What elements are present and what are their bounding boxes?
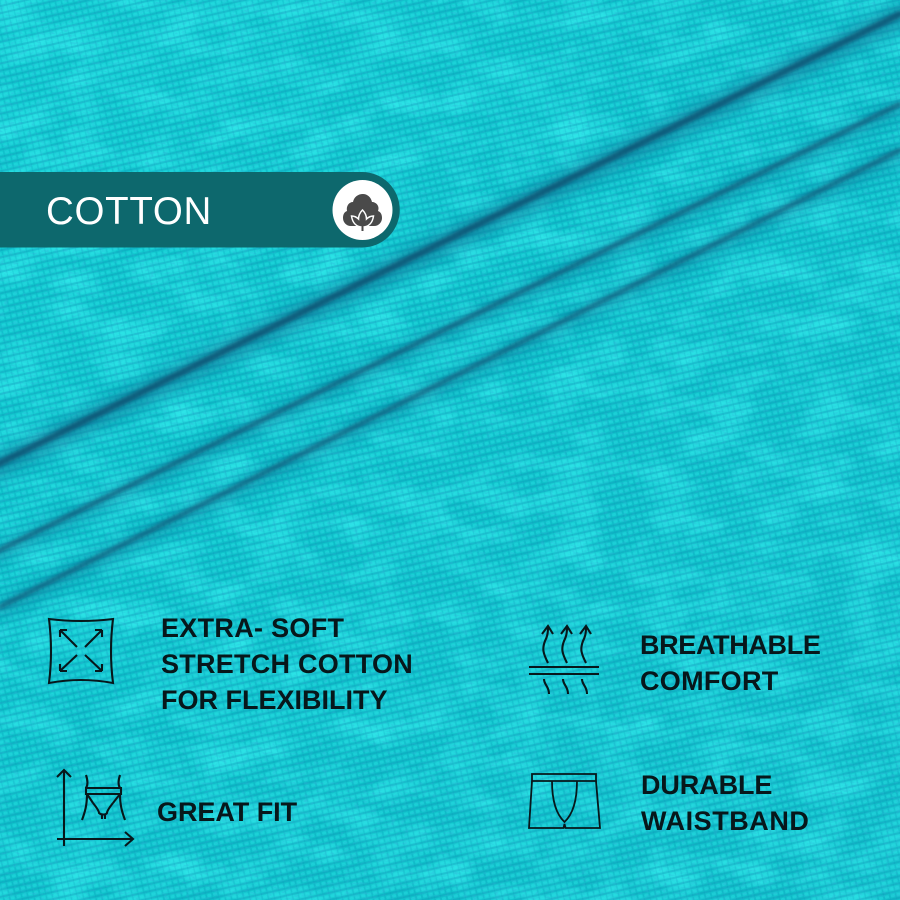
text: durable waistband: DURABLE xyxy=(641,770,772,800)
text: extra-soft stretch cotton: STRETCH COTTON xyxy=(161,649,413,679)
icon: cotton boll xyxy=(332,180,392,240)
heading: COTTON xyxy=(46,190,212,233)
text: durable waistband xyxy=(641,770,809,836)
text: breathable comfort xyxy=(640,630,820,696)
text: great fit: GREAT FIT xyxy=(157,797,297,827)
text: extra-soft stretch cotton: EXTRA- SOFT xyxy=(161,613,344,643)
text: extra-soft stretch cotton xyxy=(161,613,413,715)
banner bar xyxy=(0,172,400,248)
text: extra-soft stretch cotton: FOR FLEXIBILITY xyxy=(161,685,388,715)
text: durable waistband: WAISTBAND xyxy=(641,806,809,836)
text: breathable comfort: COMFORT xyxy=(640,666,779,696)
text: breathable comfort: BREATHABLE xyxy=(640,630,820,660)
